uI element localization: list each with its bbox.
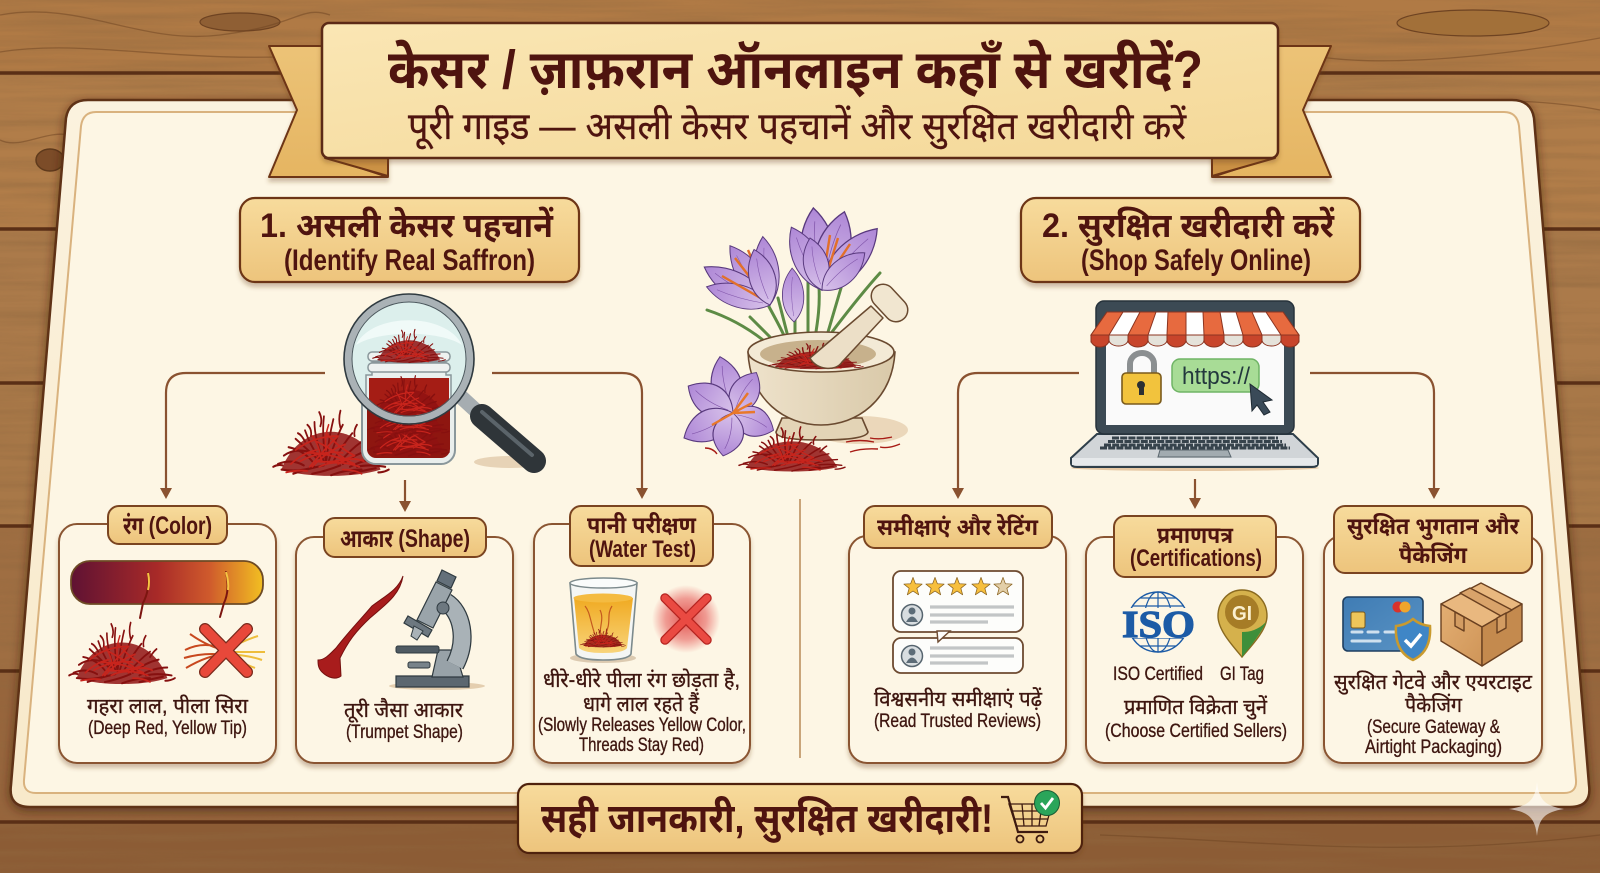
pestle [810, 296, 896, 368]
flower: upper left [698, 235, 782, 316]
awning [1091, 312, 1299, 347]
red cross with glow [652, 585, 720, 653]
arrows: right section connectors [952, 373, 1440, 509]
panel: payment and packaging card [1324, 506, 1542, 763]
flower: lower left [677, 353, 779, 459]
watermark sparkle [1509, 782, 1564, 836]
icon: magnifier over saffron jar [273, 294, 546, 476]
icon: credit card [1343, 597, 1423, 651]
label [1114, 516, 1276, 577]
footer banner [518, 784, 1082, 853]
heading: section 1 [240, 198, 579, 282]
label: पैकेजिंग [1399, 542, 1468, 568]
stars [904, 577, 1012, 595]
footer text: सही जानकारी, सुरक्षित खरीदारी! [541, 796, 993, 843]
label: समीक्षाएं और रेटिंग [877, 514, 1039, 540]
icon: parcel box [1441, 583, 1522, 666]
icon captions: ISO Certified [1113, 664, 1203, 685]
caption: Airtight Packaging) [1365, 737, 1502, 758]
cursor [1250, 384, 1272, 415]
panel: reviews card [849, 506, 1066, 763]
icon: GI pin: GI [1232, 603, 1252, 625]
trumpet thread [318, 576, 403, 678]
caption: धीरे-धीरे पीला रंग छोड़ता है, [543, 667, 740, 692]
colour gradient bar [71, 561, 263, 604]
heading: section 2 [1021, 198, 1360, 282]
caption [1105, 695, 1287, 742]
panel: parchment board [11, 100, 1589, 807]
label: सुरक्षित भुगतान और [1347, 513, 1520, 540]
caption: (Slowly Releases Yellow Color, [538, 715, 746, 736]
title banner [269, 23, 1331, 177]
caption [87, 694, 249, 739]
ground shadow [812, 416, 908, 444]
icon: ISO globe [1120, 592, 1196, 652]
caption [874, 687, 1043, 732]
https pill [1172, 359, 1259, 392]
leaves and stems [707, 273, 880, 340]
icon: mortar and crocus flowers [677, 206, 908, 472]
bowl [748, 332, 895, 440]
magnifier handle [460, 396, 534, 461]
icon: laptop with shop awning [1071, 301, 1319, 471]
icon captions: GI Tag [1220, 664, 1264, 685]
icon: shield [1396, 619, 1430, 660]
heading: section 1: (Identify Real Saffron) [284, 244, 535, 277]
fake saffron with cross [184, 629, 265, 672]
icon: shopping cart [1001, 790, 1060, 842]
label [864, 506, 1052, 548]
caption: (Deep Red, Yellow Tip) [88, 718, 247, 739]
flower: bud [781, 268, 805, 322]
label: प्रमाणपत्र [1157, 522, 1234, 548]
panel: colour card [59, 506, 276, 763]
caption: तूरी जैसा आकार [344, 697, 463, 723]
heading: section 1: 1. असली केसर पहचानें [260, 206, 554, 245]
label [108, 506, 227, 544]
caption: धागे लाल रहते हैं [583, 692, 700, 716]
caption: प्रमाणित विक्रेता चुनें [1124, 695, 1267, 720]
caption: Threads Stay Red) [579, 735, 704, 756]
caption: विश्वसनीय समीक्षाएं पढ़ें [874, 687, 1043, 711]
label: आकार (Shape) [340, 525, 470, 553]
title text: केसर / ज़ाफ़रान ऑनलाइन कहाँ से खरीदें? [388, 39, 1203, 100]
ribbon tails [269, 46, 1331, 177]
panel: shape card [296, 518, 513, 763]
label [570, 506, 713, 566]
label: (Certifications) [1130, 545, 1262, 572]
label: पानी परीक्षण [587, 512, 696, 538]
caption [538, 667, 746, 756]
label: (Water Test) [589, 536, 696, 563]
caption: (Trumpet Shape) [346, 722, 463, 743]
https pill: https:// [1182, 363, 1250, 390]
microscope [389, 570, 485, 690]
caption: (Choose Certified Sellers) [1105, 721, 1287, 742]
caption: पैकेजिंग [1405, 692, 1463, 717]
arrows: left section connectors [160, 373, 648, 512]
label: रंग (Color) [123, 512, 212, 540]
strands [140, 572, 228, 618]
flower: upper right [779, 206, 888, 300]
label [1334, 506, 1532, 573]
glass of water [570, 578, 637, 663]
caption: (Read Trusted Reviews) [874, 711, 1041, 732]
label [324, 518, 486, 557]
lock [1122, 353, 1161, 404]
icon: GI pin [1218, 590, 1267, 657]
caption [1334, 670, 1532, 758]
divider [799, 499, 801, 758]
caption [344, 697, 463, 743]
review bubbles [893, 571, 1023, 673]
heading: section 2: 2. सुरक्षित खरीदारी करें [1042, 206, 1335, 247]
icon: ISO globe: ISO [1122, 604, 1195, 646]
panel: certifications card [1086, 516, 1303, 763]
caption: (Secure Gateway & [1367, 717, 1500, 738]
saffron pile [69, 623, 175, 684]
heading: section 2: (Shop Safely Online) [1081, 244, 1311, 277]
saffron heap at mortar [739, 427, 845, 472]
caption: गहरा लाल, पीला सिरा [87, 694, 249, 718]
subtitle text: पूरी गाइड — असली केसर पहचानें और सुरक्षित खरीदारी करें [408, 104, 1187, 150]
caption: सुरक्षित गेटवे और एयरटाइट [1334, 670, 1532, 695]
panel: water test card [534, 506, 750, 763]
